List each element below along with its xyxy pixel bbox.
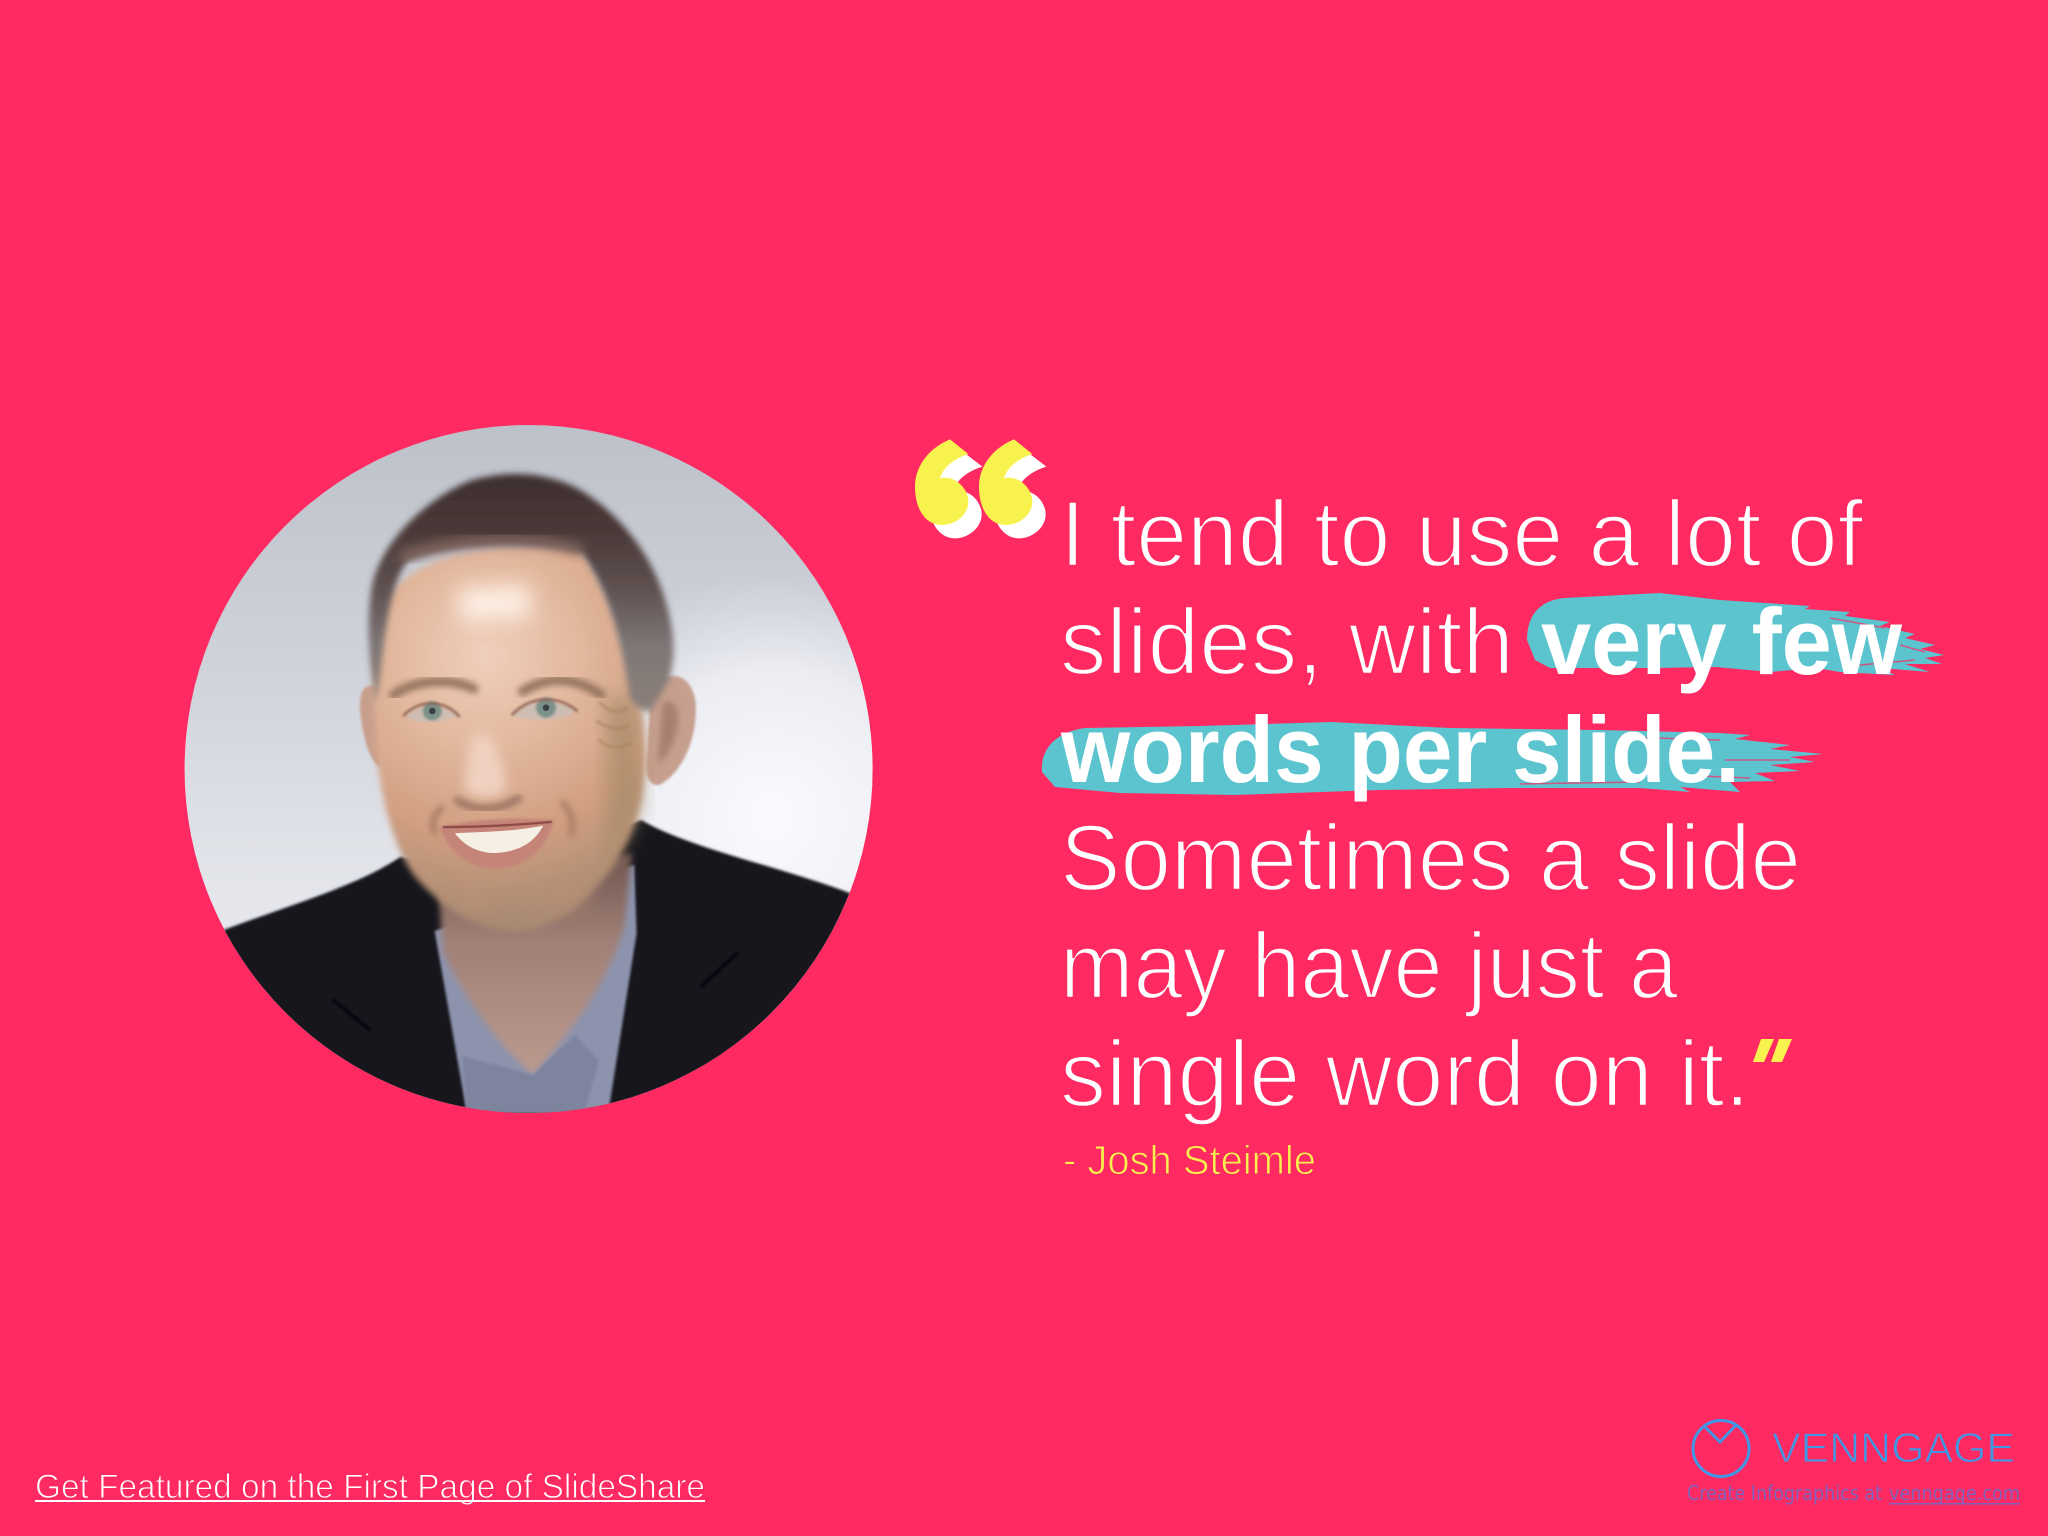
Venngage tagline: Create Infographics at [1687,1481,1882,1505]
quote mark: opening [915,439,1046,538]
footer link: Get Featured on the First Page of SlideShare [35,1468,705,1506]
quote text: slides, with [1060,589,1514,694]
brush stroke behind "words per slide." [1042,722,1823,795]
quote text: may have just a [1060,913,1679,1018]
quote mark: closing [1753,1039,1792,1062]
brush stroke behind "very few" [1527,593,1944,675]
quote text [1060,481,1903,1126]
emphasis: words per slide: words per slide. [1060,697,1740,802]
Venngage wordmark: VENNGAGE [1772,1424,2015,1471]
attribution: - Josh Steimle [1063,1137,1316,1183]
Venngage tagline: venngage.com [1889,1481,2020,1505]
emphasis: very few: very few [1541,589,1903,694]
icon: Venngage logo [1693,1420,1749,1476]
quote text: single word on it. [1060,1021,1750,1126]
portrait photo: Josh Steimle [184,425,873,1113]
Venngage tagline [1687,1481,2020,1505]
quote text: I tend to use a lot of [1060,481,1864,586]
quote text: Sometimes a slide [1060,805,1801,910]
